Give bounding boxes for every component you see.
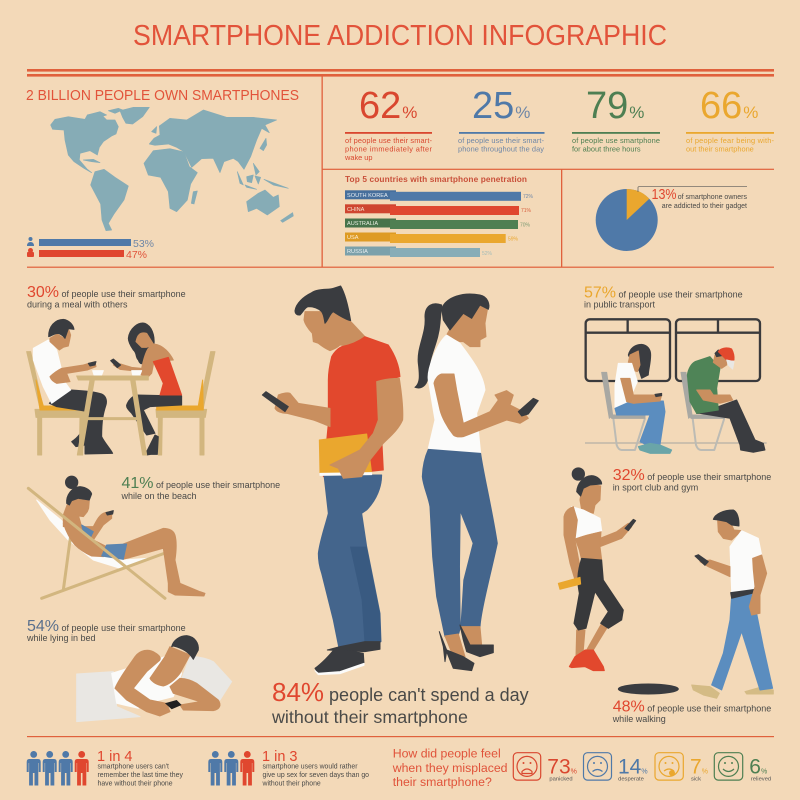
illustration: woman on deck chair <box>28 476 205 598</box>
text: 48%: while walking <box>612 714 666 724</box>
bar: Australia: 70% <box>520 222 531 228</box>
panel: pie chart 13% <box>596 186 747 251</box>
text: 57%: in public transport <box>584 300 656 310</box>
stat 66%: 66% <box>700 85 758 127</box>
illustration: man with book <box>262 286 403 675</box>
stat 25%: phone throughout the day <box>458 144 544 154</box>
feeling: panicked <box>513 753 577 782</box>
illustration: man lying in bed <box>77 636 232 722</box>
panel: beach and bed illustrations <box>26 475 280 722</box>
panel: four key percentages <box>344 85 775 162</box>
stat 25%: of people use their smart- <box>458 136 545 145</box>
text: 54%: 54% of people use their smartphone <box>27 618 186 635</box>
headline: 84%: 84% people can't spend a day <box>272 677 529 707</box>
text: 41%: while on the beach <box>120 491 197 501</box>
icon: man <box>27 237 34 246</box>
gender bars: 47% <box>126 249 147 261</box>
bar: South Korea: SOUTH KOREA <box>347 193 388 199</box>
gender bars <box>27 237 154 261</box>
stat 62%: of people use their smart- <box>345 136 433 145</box>
world map <box>51 107 293 231</box>
bar: USA: 59% <box>508 236 519 242</box>
feeling: desperate <box>584 753 648 782</box>
text: 41%: 41% of people use their smartphone <box>122 475 280 492</box>
chart heading: Top 5 countries with smartphone penetration <box>345 174 527 184</box>
question: misplaced smartphone: their smartphone? <box>393 775 492 789</box>
pie label: 13% <box>652 186 676 203</box>
gender bars: 53% <box>133 238 154 250</box>
panel: bottom stats 1 in 4: remember the last time they <box>98 772 183 779</box>
illustration: woman with ponytail <box>415 294 538 671</box>
illustration: gym woman <box>558 467 636 671</box>
feeling: desperate: 14% <box>618 756 648 778</box>
icon: people 2 blue 1 red <box>208 751 254 786</box>
bar: China: CHINA <box>347 207 365 213</box>
illustration: walking man and manhole <box>618 510 773 698</box>
panel: sport club and walking <box>558 467 773 724</box>
bar: USA: USA <box>347 235 359 241</box>
panel: bottom stats 1 in 3 <box>208 749 369 788</box>
text: 32%: in sport club and gym <box>613 483 698 493</box>
feeling: sick: sick <box>691 776 701 782</box>
stat 79%: for about three hours <box>572 144 641 154</box>
heading: 2 billion people: 2 BILLION PEOPLE OWN SMARTPHONES <box>26 88 299 104</box>
feeling: relieved <box>714 753 771 782</box>
bar: South Korea <box>345 190 534 201</box>
feeling: sick <box>655 753 708 782</box>
question: misplaced smartphone: How did people feel <box>393 746 501 760</box>
bar: South Korea: 72% <box>523 194 534 200</box>
bar: Russia: RUSSIA <box>347 249 368 255</box>
stat 62% <box>344 85 433 162</box>
stat 25%: 25% <box>472 85 530 127</box>
stat 66% <box>686 85 775 154</box>
stat 66%: out their smartphone <box>686 144 754 154</box>
text: 48%: 48% of people use their smartphone <box>613 699 771 716</box>
bar: China: 71% <box>521 208 532 214</box>
stat 25% <box>458 85 545 154</box>
text: 30%: during a meal with others <box>27 300 128 310</box>
stat 79%: of people use smartphone <box>572 136 660 145</box>
stat 62%: 62% <box>359 85 417 127</box>
text: 30%: 30% of people use their smartphone <box>27 284 186 301</box>
panel: world population <box>26 88 299 261</box>
stat 62%: wake up <box>344 153 373 162</box>
feeling: desperate: desperate <box>618 776 644 782</box>
panel: bottom stats 1 in 3: give up sex for seven days than go <box>262 772 369 779</box>
title: SMARTPHONE ADDICTION INFOGRAPHIC <box>133 20 667 52</box>
panel: bottom stats 1 in 4: smartphone users can't <box>98 764 169 770</box>
panel: bottom stats 1 in 4 <box>27 749 183 788</box>
text: 57%: 57% of people use their smartphone <box>584 284 743 301</box>
bar: China <box>345 204 532 215</box>
text: 1 in 3: 1 in 3 <box>262 749 297 765</box>
panel: public transport <box>584 284 767 453</box>
panel: bottom stats 1 in 3: smartphone users would rather <box>262 764 358 770</box>
panel: feelings <box>513 753 771 782</box>
panel: bottom stats 1 in 4: have without their phone <box>98 780 173 788</box>
feeling: sick: 7% <box>690 756 708 778</box>
stat 62%: phone immediately after <box>345 144 433 154</box>
question: misplaced smartphone: when they misplaced <box>392 761 508 775</box>
panel: top 5 countries bar chart <box>345 174 534 257</box>
bar: Russia: 52% <box>482 251 493 257</box>
pie label: of smartphone owners <box>678 194 747 201</box>
panel: bottom stats 1 in 3: without their phone <box>262 780 321 788</box>
bar: Australia: AUSTRALIA <box>347 221 378 227</box>
feeling: panicked: panicked <box>549 776 573 782</box>
stat 79% <box>572 85 660 154</box>
headline: 84%: without their smartphone <box>271 707 468 727</box>
feeling: relieved: relieved <box>751 776 771 782</box>
illustration: couple at table <box>27 319 215 455</box>
bar: USA <box>345 232 519 243</box>
panel: central couple <box>262 286 538 675</box>
stat 79%: 79% <box>586 85 644 127</box>
bar: Australia <box>345 218 531 229</box>
bar: Russia <box>345 246 493 257</box>
feeling: relieved: 6% <box>749 756 767 778</box>
stat 66%: of people fear being with- <box>686 136 775 145</box>
illustration: passengers on train <box>585 319 767 453</box>
icon: people 3 blue 1 red <box>27 751 89 786</box>
pie label <box>652 186 747 210</box>
text: 54%: while lying in bed <box>26 633 96 643</box>
panel: meal <box>27 284 215 455</box>
text: 1 in 4: 1 in 4 <box>97 749 132 765</box>
pie label: are addicted to their gadget <box>662 203 747 210</box>
feeling: panicked: 73% <box>547 756 577 778</box>
text: 32%: 32% of people use their smartphone <box>613 467 771 484</box>
icon: woman <box>27 248 34 257</box>
